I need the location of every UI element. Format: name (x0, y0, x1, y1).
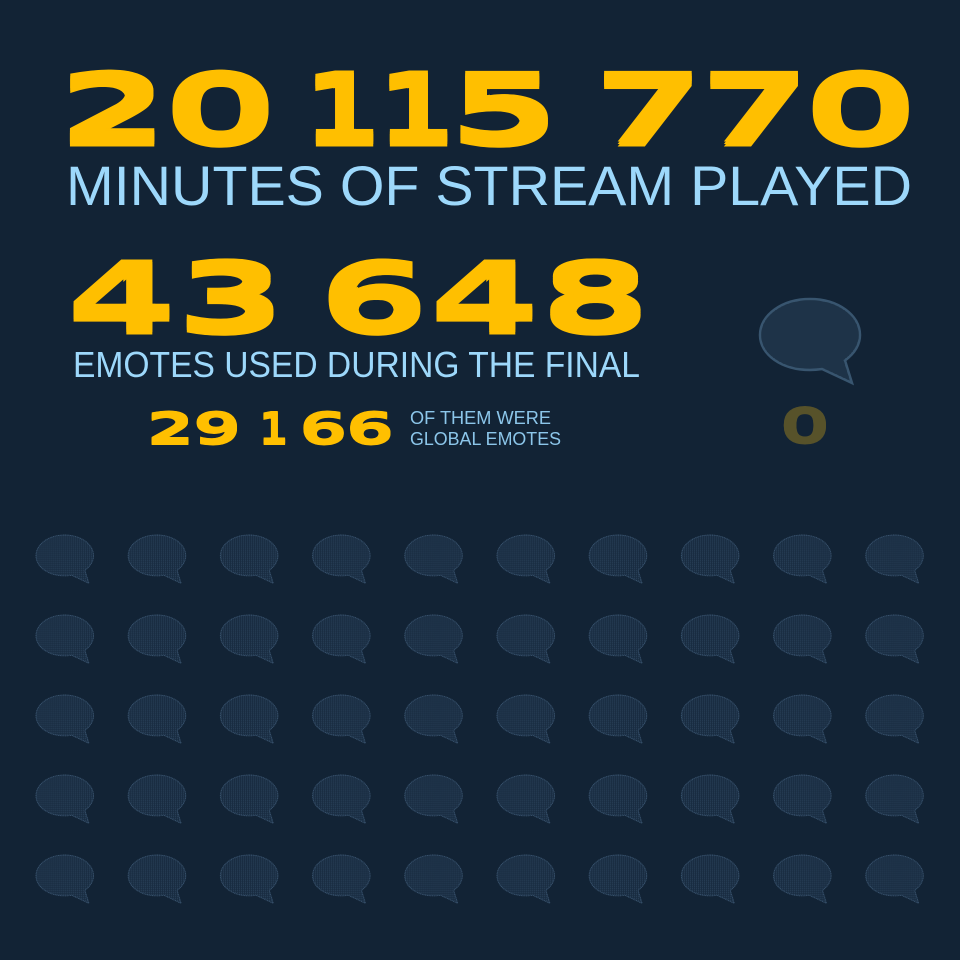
label: of them were global emotes: GLOBAL EMOTES (410, 429, 561, 449)
muted zero count: 0 (780, 399, 830, 455)
grid of speech bubbles (36, 535, 923, 903)
label: minutes of stream played: MINUTES OF STREAM PLAYED (66, 154, 912, 217)
bubble row 2 (36, 615, 923, 663)
bubble row 4 (36, 775, 923, 823)
headline number: minutes: 770 (592, 54, 918, 167)
bubble row 3 (36, 695, 923, 743)
headline number: emotes: 648 (317, 243, 652, 355)
headline number: minutes: 5 (446, 54, 561, 167)
label: of them were global emotes: OF THEM WERE (410, 408, 551, 428)
headline number: minutes: 20 (55, 54, 278, 167)
headline number: emotes: 43 (65, 243, 288, 355)
number: global emotes (145, 403, 395, 455)
icon: large speech bubble (760, 299, 860, 383)
headline number: minutes (55, 54, 918, 168)
headline number: minutes: 11 (301, 55, 456, 168)
label: emotes used during the final: EMOTES USED DURING THE FINAL (73, 344, 640, 385)
number: global emotes: 29 (145, 403, 242, 454)
number: global emotes: 66 (299, 403, 395, 454)
label: of them were global emotes (410, 408, 561, 449)
number: global emotes: 1 (258, 404, 289, 455)
headline number: emotes (65, 243, 652, 355)
bubble row 1 (36, 535, 923, 583)
bubble row 5 (36, 855, 923, 903)
